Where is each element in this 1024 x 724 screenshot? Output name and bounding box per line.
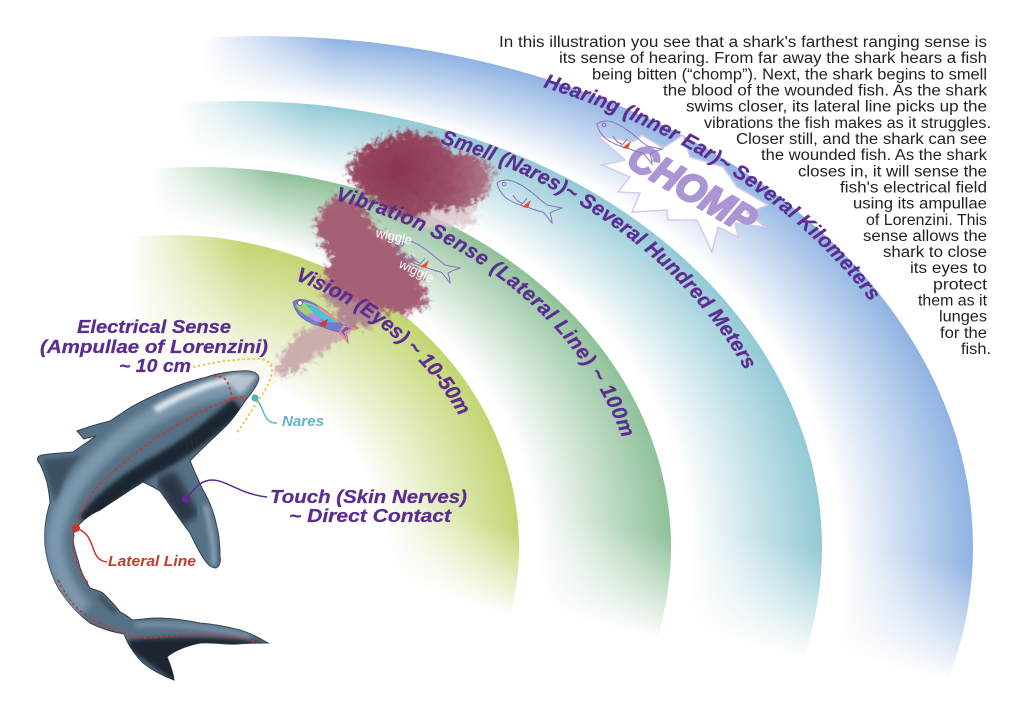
text block: explanation: the wounded fish. As the shark bbox=[761, 147, 987, 164]
text block: explanation: its eyes to bbox=[910, 260, 987, 277]
text block: explanation: using its ampullae bbox=[853, 196, 987, 213]
callout: touch: Touch (Skin Nerves) bbox=[270, 487, 467, 507]
label: electrical sense: ~ 10 cm bbox=[119, 356, 191, 376]
text block: explanation bbox=[499, 34, 991, 358]
label: wiggle upper: wiggle bbox=[373, 225, 414, 248]
label: wiggle lower: wiggle bbox=[396, 256, 436, 286]
curved label: hearing: Hearing (Inner Ear)~ Several Kilometers bbox=[543, 74, 878, 300]
callout: touch: ~ Direct Contact bbox=[289, 506, 452, 526]
blood cloud trail bbox=[274, 130, 495, 378]
text block: explanation: In this illustration you see that a shark's farthest ranging sense is bbox=[499, 34, 987, 51]
callout: nares: Nares bbox=[282, 414, 324, 430]
curved label: vibration: Vibration Sense (Lateral Line) ~ 100m bbox=[338, 186, 632, 436]
text block: explanation: being bitten (“chomp”). Next, the shark begins to smell bbox=[592, 66, 987, 83]
starburst: chomp sound: CHOMP bbox=[620, 136, 764, 243]
lateral line and electrical sense dashes bbox=[58, 376, 257, 642]
curved label: smell: Smell (Nares)~ Several Hundred Meters bbox=[441, 131, 754, 368]
text block: explanation: its sense of hearing. From far away the shark hears a fish bbox=[559, 50, 987, 67]
callout: lateral line: Lateral Line bbox=[108, 554, 196, 570]
text block: explanation: the blood of the wounded fish. As the shark bbox=[663, 82, 987, 100]
panel: vibration range arc bbox=[140, 160, 680, 650]
text block: explanation: them as it bbox=[918, 293, 988, 310]
text block: explanation: closes in, it will sense the bbox=[798, 163, 987, 180]
label: electrical sense: (Ampullae of Lorenzini) bbox=[40, 337, 268, 357]
text block: explanation: lunges bbox=[939, 309, 987, 326]
panel: hearing range arc bbox=[190, 30, 980, 700]
text block: explanation: swims closer, its lateral line picks up the bbox=[686, 99, 987, 116]
callout: lateral line bbox=[72, 524, 196, 570]
panel: smell range arc bbox=[170, 95, 830, 680]
label: electrical sense bbox=[40, 317, 268, 376]
callout: electrical sense range dashes bbox=[193, 359, 272, 433]
fish: hearing range wounded fish bbox=[597, 121, 662, 164]
fish: vibration range wiggling fish bbox=[395, 240, 460, 283]
text block: explanation: for the bbox=[940, 325, 987, 342]
curved label: vision: Vision (Eyes) ~ 10-50m bbox=[298, 267, 468, 414]
label: electrical sense: Electrical Sense bbox=[77, 317, 231, 337]
callout: touch bbox=[182, 480, 467, 526]
callout: nares bbox=[251, 394, 324, 430]
illustration: shark bbox=[38, 371, 268, 682]
fish: smell range wounded fish bbox=[497, 180, 562, 223]
text block: explanation: sense allows the bbox=[863, 228, 987, 245]
text block: explanation: of Lorenzini. This bbox=[866, 212, 987, 229]
text block: explanation: fish's electrical field bbox=[840, 179, 987, 196]
fish: vision range colourful fish bbox=[293, 299, 358, 343]
panel: vision range arc bbox=[120, 230, 525, 630]
text block: explanation: protect bbox=[933, 276, 988, 293]
text block: explanation: fish. bbox=[961, 341, 991, 358]
text block: explanation: Closer still, and the shark can see bbox=[736, 131, 987, 148]
text block: explanation: vibrations the fish makes as it struggles. bbox=[704, 115, 991, 132]
text block: explanation: shark to close bbox=[883, 244, 987, 261]
